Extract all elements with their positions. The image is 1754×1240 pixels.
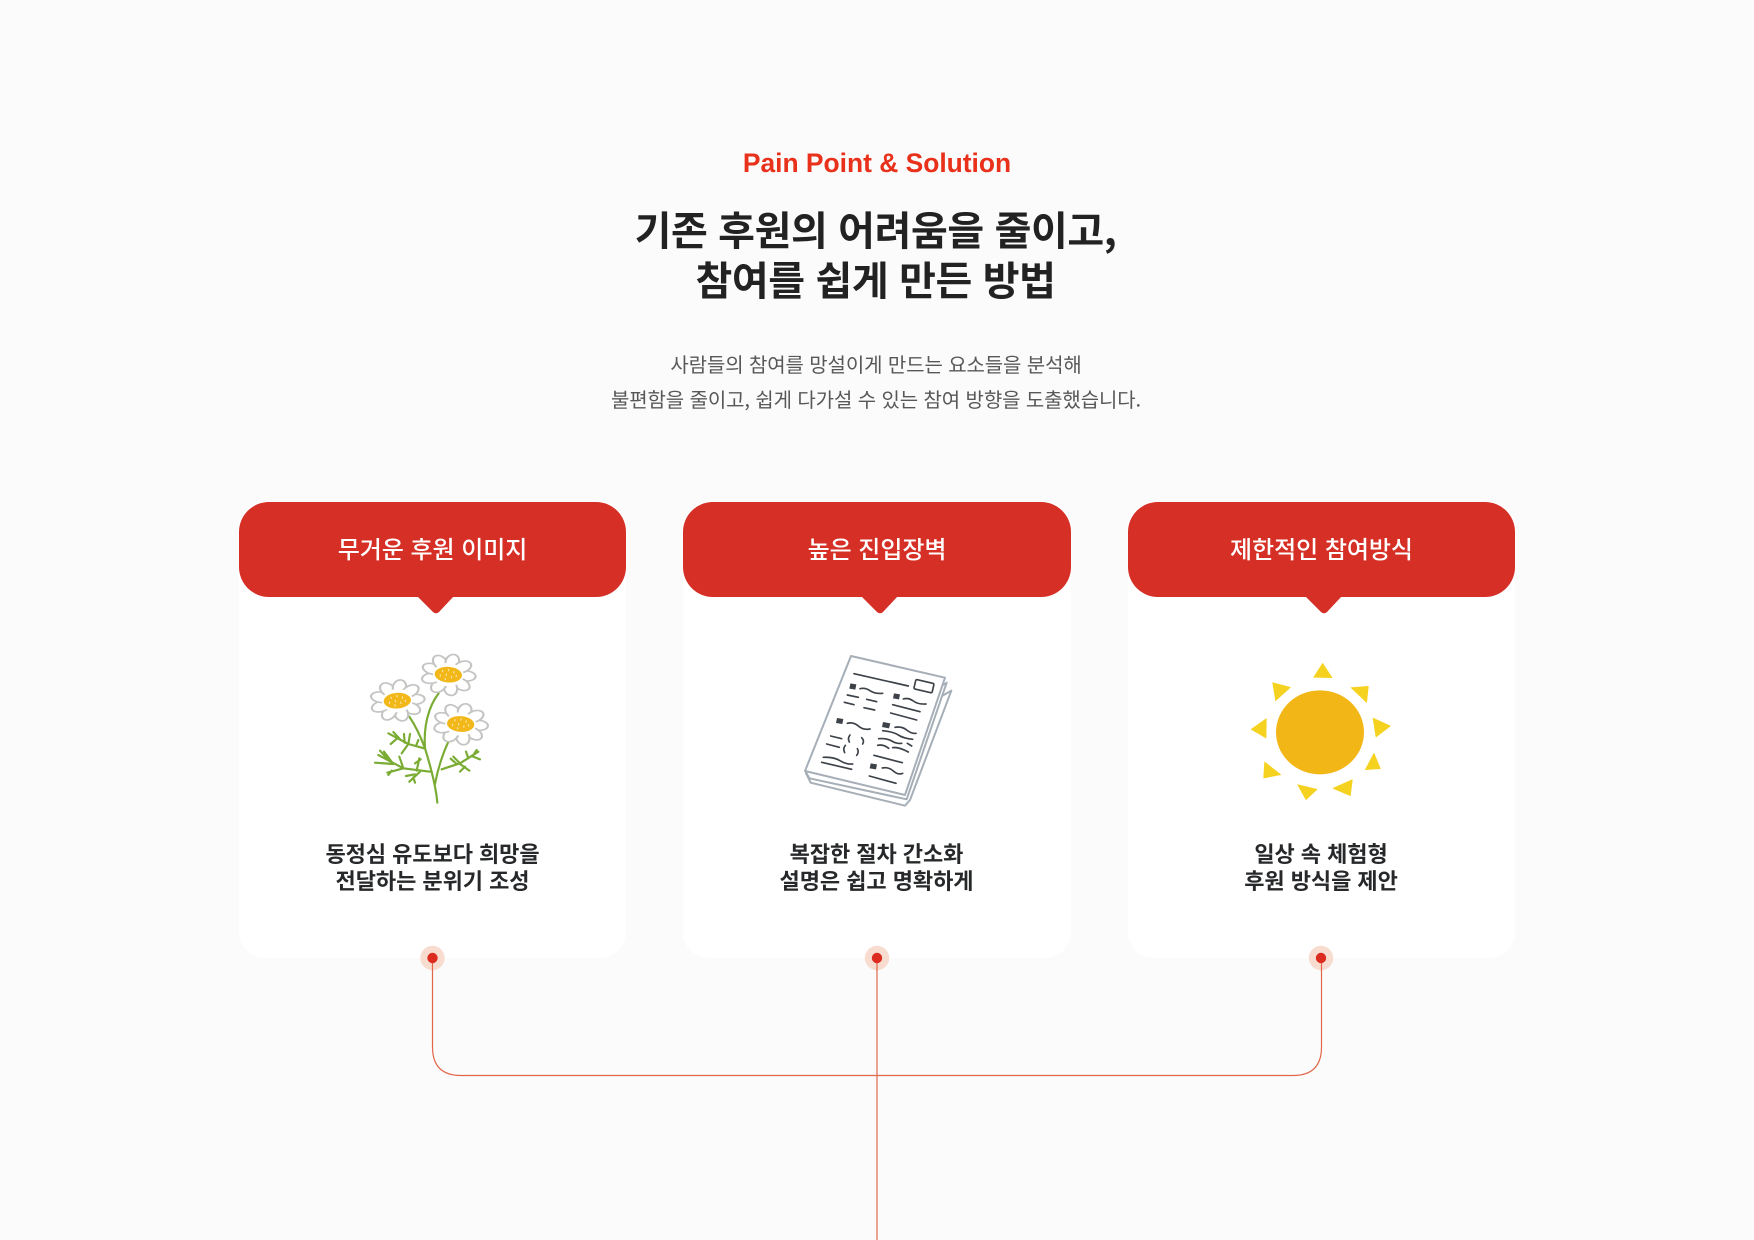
icon: sun [1251,663,1391,800]
description text [611,349,1141,412]
title: 기존 후원의 어려움을 줄이고, [635,199,1116,257]
pointer notch [1306,597,1341,614]
header label: 무거운 후원 이미지 [338,530,527,564]
pointer notch [862,597,897,614]
description text: 불편함을 줄이고, 쉽게 다가설 수 있는 참여 방향을 도출했습니다. [611,384,1141,412]
panel: 제한적인 참여방식 [1128,502,1515,958]
panel text: 일상 속 체험형 [1254,837,1388,869]
icon: chamomile flowers [370,654,489,804]
panel header with pointer [1128,502,1515,597]
pointer notch [418,597,453,614]
panel: 무거운 후원 이미지 [239,502,626,958]
panel text [780,837,973,896]
description text: 사람들의 참여를 망설이게 만드는 요소들을 분석해 [670,349,1082,378]
panel text: 설명은 쉽고 명확하게 [780,864,973,896]
header label: 높은 진입장벽 [808,530,946,564]
panel text: 동정심 유도보다 희망을 [325,837,540,869]
title: 참여를 쉽게 만든 방법 [696,249,1056,307]
icon: stack of paper documents [804,655,952,807]
title [635,199,1116,307]
panel: 높은 진입장벽 [683,502,1071,958]
panel text [1244,837,1398,896]
eyebrow: Pain Point & Solution: Pain Point & Solution [743,148,1011,178]
panel text: 복잡한 절차 간소화 [790,837,963,869]
panel header with pointer [239,502,626,597]
panel text: 전달하는 분위기 조성 [336,864,529,896]
panel header with pointer [683,502,1071,597]
panel text [325,837,540,896]
panel text: 후원 방식을 제안 [1244,864,1398,896]
header label: 제한적인 참여방식 [1230,530,1413,564]
